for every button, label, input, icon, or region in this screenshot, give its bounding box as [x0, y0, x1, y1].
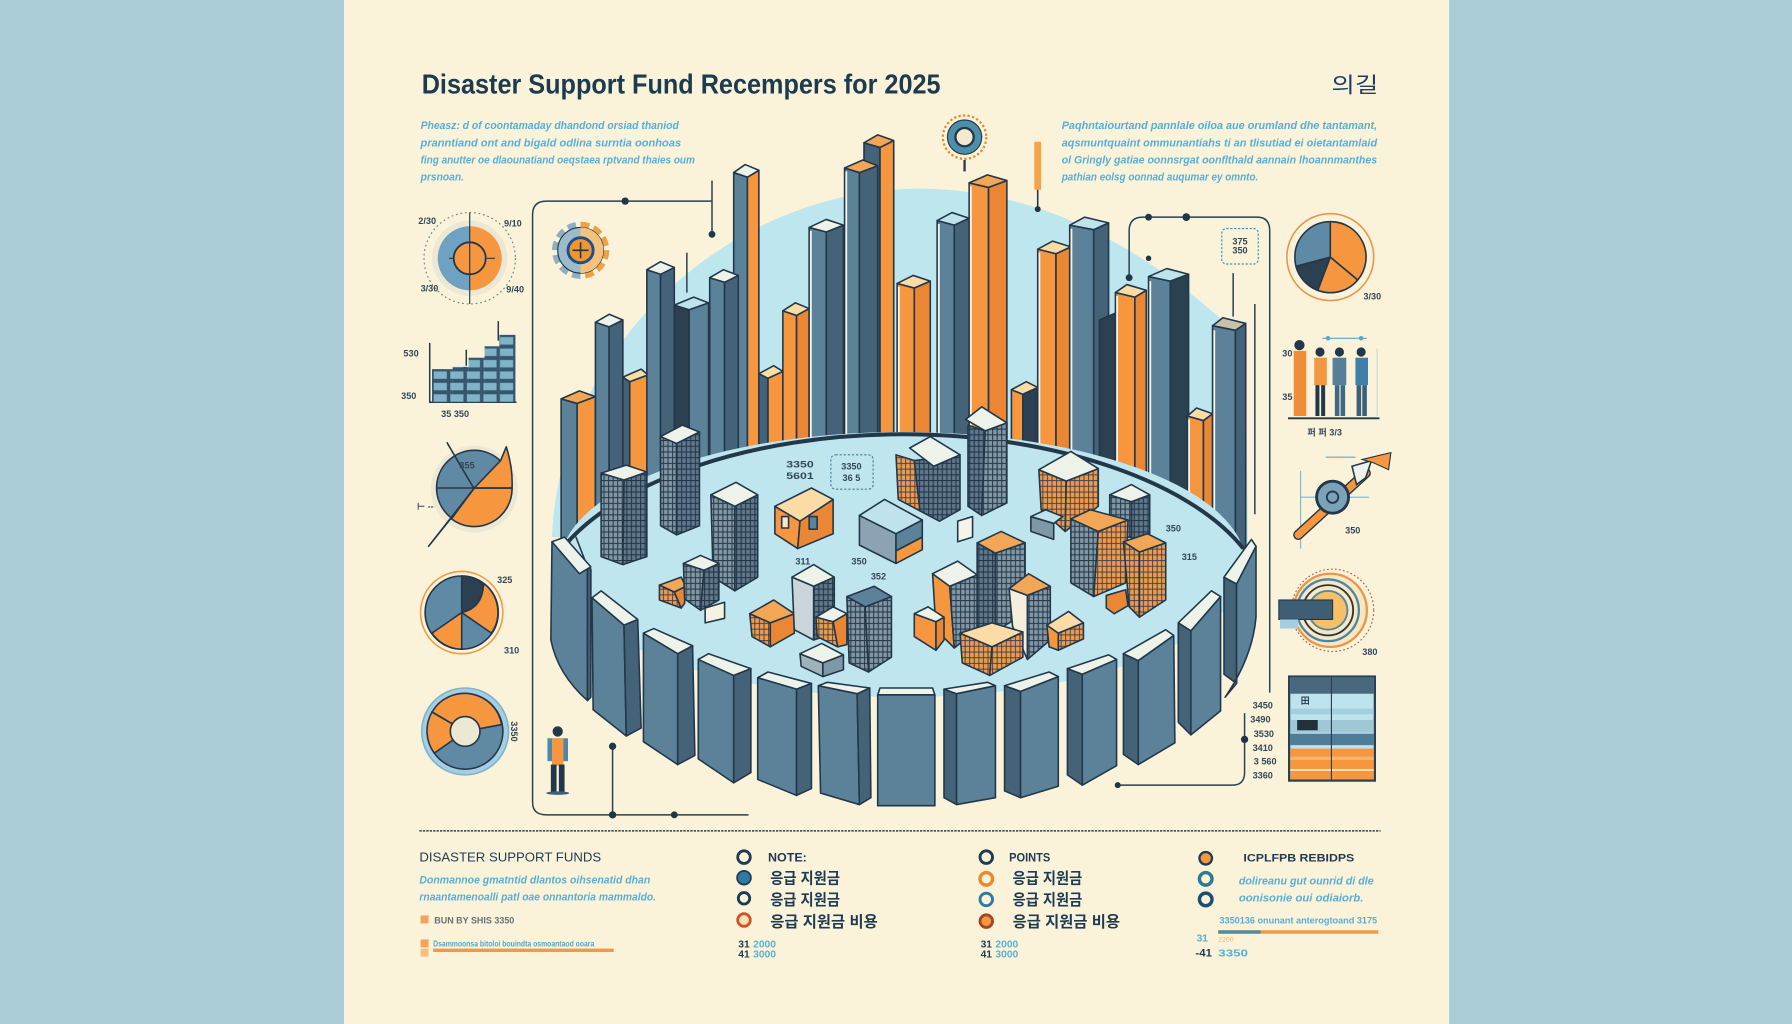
connector right	[1115, 213, 1270, 788]
front ring bars	[551, 537, 1256, 806]
left chart 3: spiked pie: ⊢ --	[417, 502, 434, 512]
footer column 3: 응급 지원금 비용	[1013, 913, 1120, 931]
footer column 2: 3000	[753, 950, 776, 961]
footer column 1: rnaantamenoalli patl oae onnantoria mammaldo.	[419, 892, 656, 904]
left chart 2: stepped bar chart: 350	[401, 391, 416, 401]
footer column 2: 41	[738, 950, 750, 961]
floor labels: 3350	[786, 459, 814, 469]
table side labels: 3530	[1254, 729, 1274, 739]
footer column 3	[980, 851, 1120, 961]
callout tag top right: 350	[1232, 246, 1248, 256]
footer column 4: 3350136 onunant anterogtoand 3175	[1219, 915, 1377, 925]
footer column 1: Dsammoonsa bitoloi bouindta osmoantaod ooara	[433, 939, 595, 948]
intro text right: Paqhntaiourtand pannlale oiloa aue orumland dhe tantamant,	[1062, 120, 1377, 132]
right chart 2: people: 35	[1282, 392, 1292, 402]
buildings: right cluster	[1031, 451, 1166, 617]
right chart 3: arrow gauge	[1298, 453, 1391, 549]
floor labels: 315	[1182, 552, 1197, 562]
title: Disaster Support Fund Recempers for 2025	[422, 69, 941, 100]
right chart 1: pie: 3/30	[1363, 291, 1381, 301]
buildings: left group	[601, 425, 758, 623]
right chart 2: people: 30	[1282, 349, 1292, 359]
footer column 4: dolireanu gut ounrid di dle	[1239, 876, 1374, 888]
footer column 3: 응급 지원금	[1013, 869, 1082, 887]
intro text right: pathian eolsg oonnad auqumar ey omnto.	[1061, 172, 1258, 184]
left chart 2: stepped bar chart: 530	[403, 349, 419, 359]
footer column 2: 응급 지원금 비용	[770, 913, 878, 931]
right chart 4: concentric rings: 380	[1362, 647, 1378, 657]
circular backdrop dome	[552, 189, 1248, 549]
footer column 4: 3350	[1218, 949, 1248, 960]
intro text right: aqsmuntquaint ommunantiahs ti an tlisutiad ei oietantamlaid	[1062, 137, 1378, 149]
buildings: centre left cluster	[750, 565, 891, 677]
left chart 1: target donut	[418, 213, 524, 304]
footer column 3: 3000	[995, 950, 1019, 961]
intro text left: fing anutter oe dlaounatiand oeqstaea rptvand thaies oum	[421, 154, 695, 166]
right chart 5: stacked table: 田	[1301, 696, 1310, 706]
footer column 3: 응급 지원금	[1013, 891, 1082, 909]
callout tag top right: 375	[1232, 237, 1248, 247]
left chart 4: wedge pie: 325	[497, 575, 512, 585]
footer column 3: POINTS	[1009, 851, 1050, 865]
footer column 4: 2200	[1218, 937, 1234, 944]
left chart 2: stepped bar chart: 35 350	[441, 409, 469, 419]
right chart 4: concentric rings	[1279, 569, 1378, 657]
floor callout tag	[831, 455, 873, 489]
intro text left: prsnoan.	[420, 172, 464, 184]
left chart 1: target donut: 9/40	[506, 285, 524, 295]
buildings: orange house and box	[775, 488, 922, 563]
left chart 3: spiked pie	[417, 442, 518, 546]
floor labels: 352	[871, 571, 886, 581]
floor callout tag: 36 5	[843, 473, 860, 483]
footer column 2: 응급 지원금	[770, 869, 840, 887]
footer column 4: oonisonie oui odiaiorb.	[1239, 893, 1363, 905]
table side labels: 3450	[1253, 701, 1273, 711]
intro text left	[420, 120, 695, 184]
footer column 3: 41	[981, 950, 992, 961]
right chart 3: arrow gauge: 350	[1345, 526, 1360, 536]
footer column 4	[1195, 852, 1378, 960]
left chart 2: stepped bar chart	[401, 321, 517, 419]
footer column 4: -41	[1195, 948, 1213, 960]
icon: person	[546, 726, 569, 795]
left chart 5: donut pie	[422, 688, 519, 775]
left chart 4: wedge pie	[421, 571, 519, 656]
floor labels: 350	[851, 557, 867, 567]
right chart 5: stacked table	[1289, 677, 1375, 781]
floor labels	[786, 459, 1197, 581]
footer column 4: ICPLFPB REBIDPS	[1243, 853, 1355, 865]
floor labels: 5601	[786, 471, 814, 481]
footer column 2	[737, 851, 878, 961]
intro text right: ol Gringly gatiae oonnsrgat oonflthald aannain lhoannmanthes	[1062, 154, 1377, 166]
icon: orange pin	[1034, 142, 1041, 212]
left chart 1: target donut: 2/30	[418, 216, 436, 226]
callout tag top right	[1222, 229, 1258, 264]
left chart 1: target donut: 3/30	[421, 283, 438, 293]
footer column 1: DISASTER SUPPORT FUNDS	[419, 850, 601, 865]
table side labels	[1250, 701, 1277, 780]
left chart 5: donut pie: 3350	[509, 721, 519, 742]
connector left	[533, 181, 749, 819]
footer column 2: 31	[738, 939, 750, 950]
footer column 2: 2000	[753, 939, 776, 950]
footer column 2: 응급 지원금	[770, 891, 840, 909]
table side labels: 3410	[1253, 743, 1273, 753]
circular floor	[560, 432, 1246, 697]
intro text right	[1061, 120, 1378, 184]
intro text left: Pheasz: d of coontamaday dhandond orsiad thaniod	[421, 120, 679, 132]
table side labels: 3360	[1253, 770, 1273, 780]
korean corner label: 의길	[1331, 73, 1378, 98]
icon: top medal	[943, 115, 986, 171]
footer column 1	[419, 850, 656, 957]
footer column 2: NOTE:	[768, 851, 807, 865]
right chart 1: pie	[1287, 214, 1381, 301]
buildings: centre back cluster	[896, 407, 1007, 542]
floor labels: 311	[795, 557, 810, 567]
back bar chart	[561, 135, 1246, 549]
intro text left: pranntiand ont and bigald odlina surntia oonhoas	[420, 137, 681, 149]
buildings: centre right cluster	[914, 531, 1083, 675]
icon: gear	[557, 226, 605, 274]
left chart 4: wedge pie: 310	[504, 646, 519, 656]
footer column 4: 31	[1197, 934, 1208, 945]
right chart 2: people: 퍼 퍼 3/3	[1307, 427, 1342, 437]
footer column 1: BUN BY SHIS 3350	[434, 915, 514, 925]
footer column 3: 31	[981, 939, 992, 950]
right chart 2: people	[1282, 336, 1379, 437]
divider	[419, 830, 1381, 832]
table side labels: 3 560	[1254, 757, 1277, 767]
footer column 1: Donmannoe gmatntid dlantos oihsenatid dhan	[419, 874, 651, 886]
cream panel	[344, 0, 1449, 1024]
left chart 3: spiked pie: 355	[459, 461, 475, 471]
footer column 3: 2000	[995, 939, 1019, 950]
floor callout tag: 3350	[841, 462, 862, 472]
floor labels: 350	[1166, 523, 1181, 533]
table side labels: 3490	[1250, 714, 1271, 724]
left chart 1: target donut: 9/10	[504, 218, 522, 228]
